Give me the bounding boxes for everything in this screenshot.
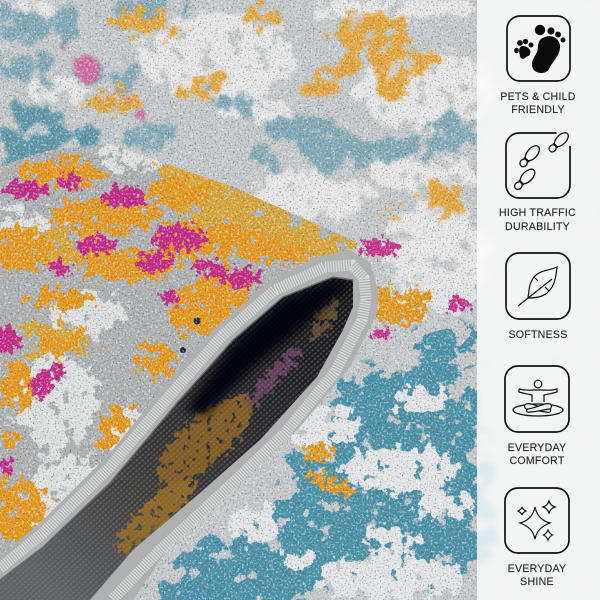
label: everyday shine: SHINE: [520, 576, 554, 588]
roll: pink fibres: [0, 174, 262, 473]
floor: near orange accents: [301, 285, 436, 502]
panel: translucent feature strip: [477, 0, 600, 600]
floor: distant pink accents: [61, 47, 147, 127]
label: high traffic durability: HIGH TRAFFIC: [499, 207, 576, 219]
icon: feather: [506, 253, 570, 319]
feature: softness: [506, 253, 570, 341]
floor: teal-grey corner behind roll: [0, 100, 120, 175]
feature: pets and child friendly: [500, 16, 576, 116]
floor: distant pale patches: [0, 0, 500, 300]
label: high traffic durability: DURABILITY: [505, 221, 570, 233]
label: softness: SOFTNESS: [508, 329, 568, 341]
icon: meditating figure: [505, 366, 569, 432]
label: pets and child friendly: PETS & CHILD: [500, 91, 576, 103]
floor: near teal patches: [145, 326, 495, 600]
rug texture: pale fibre grain: [0, 0, 477, 600]
icon: baby foot and paw print: [507, 16, 570, 81]
feature: everyday comfort: [505, 366, 569, 467]
roll: top face of rug: [0, 144, 358, 556]
floor: near white fibre patches: [225, 275, 482, 600]
label: everyday comfort: EVERYDAY: [508, 442, 566, 454]
roll: orange fibre masses: [0, 158, 306, 542]
label: pets and child friendly: FRIENDLY: [511, 104, 565, 116]
floor: near pink accents: [358, 238, 471, 340]
floor: distant teal patches: [0, 0, 487, 173]
roll: navy flecks: [180, 318, 200, 353]
roll: gold fibre band: [0, 139, 368, 356]
rug texture: dark fibre grain: [0, 0, 477, 600]
label: everyday shine: EVERYDAY: [508, 563, 566, 575]
feature: everyday shine: [505, 488, 569, 588]
roll: pale and grey fibre zones: [0, 142, 168, 544]
floor: distant orange accents: [84, 0, 475, 220]
icon: sparkles: [505, 488, 569, 553]
label: everyday comfort: COMFORT: [509, 455, 565, 467]
rug edge: serged binding: [0, 250, 378, 600]
rug underside: knit backing: [0, 278, 353, 600]
feature: high traffic durability: [499, 130, 576, 233]
icon: footprints: [506, 130, 572, 198]
